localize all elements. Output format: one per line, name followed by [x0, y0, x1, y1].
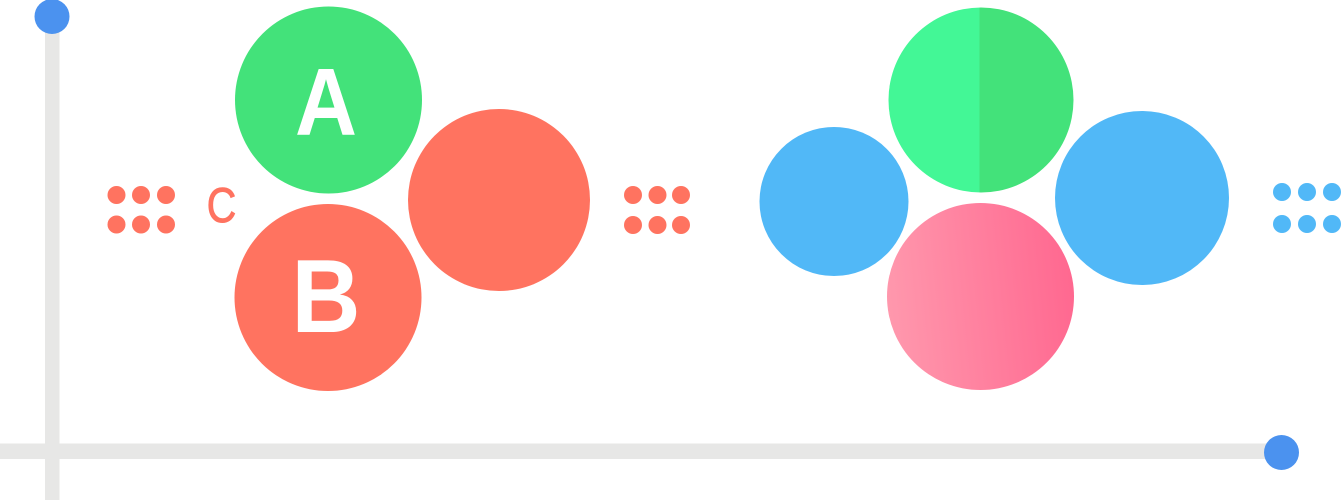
red dot grid left: [108, 186, 175, 234]
horizontal axis: [0, 435, 1299, 470]
two-tone green circle: [888, 7, 1074, 193]
circle B: [234, 204, 422, 391]
icon: horizontal axis end dot: [1264, 435, 1299, 470]
blue circle right: [1055, 111, 1229, 285]
blue dot grid right: [1273, 183, 1341, 233]
icon: vertical axis end dot: [34, 0, 70, 34]
label B: B: [292, 239, 360, 355]
circle A: [235, 6, 422, 194]
pink gradient circle: [887, 203, 1074, 390]
vertical axis: [34, 0, 70, 500]
red dot grid middle: [624, 186, 690, 234]
label A: A: [295, 49, 357, 156]
blue circle left: [760, 127, 908, 276]
label C: C: [207, 179, 236, 233]
red circle right: [408, 109, 590, 291]
